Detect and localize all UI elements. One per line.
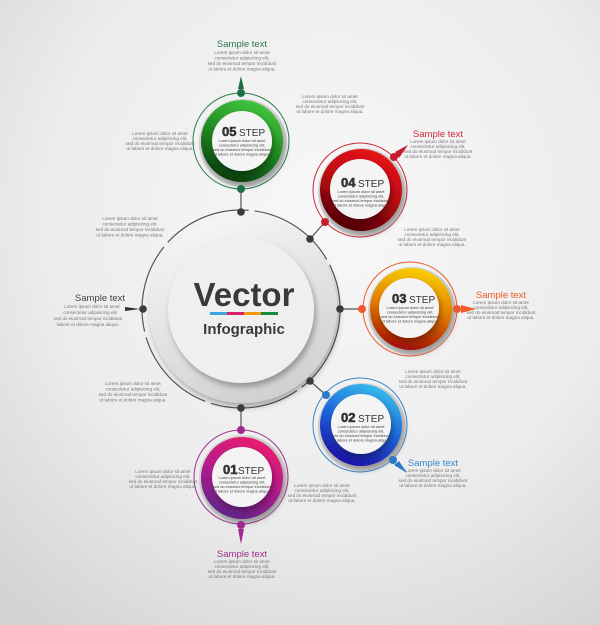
step 02: STEP xyxy=(358,414,384,425)
text block: sed do eiusmod tempor incididunt xyxy=(288,493,357,498)
text block: sed do eiusmod tempor incididunt xyxy=(296,104,365,109)
text block: Lorem ipsum dolor sit amet xyxy=(105,381,161,386)
heading 02 xyxy=(399,458,468,488)
text block: Lorem ipsum dolor sit amet xyxy=(404,227,460,232)
step 03: Lorem ipsum dolor sit amet xyxy=(387,305,434,310)
text block: consectetur adipisicing elit, xyxy=(295,488,349,493)
text block: sed do eiusmod tempor incididunt xyxy=(129,479,198,484)
step 02: consectetur adipisicing elit, xyxy=(338,428,384,434)
heading 04: Lorem ipsum dolor sit amet xyxy=(410,139,466,144)
heading 01: consectetur adipisicing elit, xyxy=(215,564,269,569)
heading 02: Sample text xyxy=(408,458,458,469)
heading 05: sed do eiusmod tempor incididunt xyxy=(208,61,277,66)
step 01: ut labore et dolore magna aliqua. xyxy=(214,488,270,494)
step 05: sed do eiusmod tempor incididunt xyxy=(213,147,272,152)
text block: consectetur adipisicing elit, xyxy=(106,386,160,392)
step 05: 05 xyxy=(222,124,236,139)
step 02: ut labore et dolore magna aliqua. xyxy=(333,438,389,442)
heading 05: consectetur adipisicing elit, xyxy=(215,56,269,60)
step 05: Lorem ipsum dolor sit amet xyxy=(219,138,266,143)
heading 04 xyxy=(404,129,473,159)
heading 04: ut labore et dolore magna aliqua. xyxy=(404,154,472,159)
text block: sed do eiusmod tempor incididunt xyxy=(398,237,467,242)
heading 02: ut labore et dolore magna aliqua. xyxy=(399,483,467,488)
step 05: ut labore et dolore magna aliqua. xyxy=(214,152,270,156)
text block xyxy=(296,94,365,114)
text block: consectetur adipisicing elit, xyxy=(405,232,459,237)
heading 03: consectetur adipisicing elit, xyxy=(474,305,528,310)
step 03: consectetur adipisicing elit, xyxy=(387,310,433,314)
step 04: STEP xyxy=(358,179,384,190)
text block: sed do eiusmod tempor incididunt xyxy=(99,392,168,397)
text block xyxy=(129,469,198,489)
text block: ut labore et dolore magna aliqua. xyxy=(99,398,167,402)
heading 02: sed do eiusmod tempor incididunt xyxy=(399,478,468,483)
heading 03: Lorem ipsum dolor sit amet xyxy=(473,300,529,305)
text block: ut labore et dolore magna aliqua. xyxy=(96,232,164,238)
heading 05 xyxy=(208,39,277,72)
heading left: Sample text xyxy=(75,293,125,304)
heading 05: Sample text xyxy=(217,39,267,50)
text block: ut labore et dolore magna aliqua. xyxy=(129,484,197,489)
step 01: sed do eiusmod tempor incididunt xyxy=(213,484,272,489)
step 05: consectetur adipisicing elit, xyxy=(219,142,265,148)
heading 01: ut labore et dolore magna aliqua. xyxy=(208,574,276,579)
text block: sed do eiusmod tempor incididunt xyxy=(96,227,165,232)
text block: consectetur adipisicing elit, xyxy=(303,99,357,104)
heading left: sed do eiusmod tempor incididunt xyxy=(54,316,123,321)
text block: Lorem ipsum dolor sit amet xyxy=(102,216,158,221)
heading 05: ut labore et dolore magna aliqua. xyxy=(208,66,276,72)
heading left: labore et dolore magna aliqua. xyxy=(57,322,119,327)
text block: consectetur adipisicing elit, xyxy=(136,474,190,479)
step 02: Lorem ipsum dolor sit amet xyxy=(338,424,385,429)
text block xyxy=(96,216,165,238)
heading 01: Sample text xyxy=(217,549,267,560)
text block: Lorem ipsum dolor sit amet xyxy=(302,94,358,99)
step 03: 03 xyxy=(392,291,406,306)
step 01: Lorem ipsum dolor sit amet xyxy=(219,475,266,480)
subtitle: Infographic xyxy=(203,321,285,338)
step 01: consectetur adipisicing elit, xyxy=(219,480,265,484)
text block: consectetur adipisicing elit, xyxy=(406,374,460,379)
heading 01 xyxy=(208,549,277,579)
step 03: ut labore et dolore magna aliqua. xyxy=(382,318,438,324)
step 02 xyxy=(313,378,407,473)
text block xyxy=(399,369,468,389)
heading 03: Sample text xyxy=(476,290,526,301)
heading 01: Lorem ipsum dolor sit amet xyxy=(214,559,270,564)
text blocks xyxy=(126,131,195,151)
step 04: consectetur adipisicing elit, xyxy=(338,194,384,198)
heading 05: Lorem ipsum dolor sit amet xyxy=(214,50,270,55)
text block: consectetur adipisicing elit, xyxy=(103,222,157,226)
title: Vector xyxy=(194,276,295,313)
step 04: Lorem ipsum dolor sit amet xyxy=(338,189,385,194)
step 04: sed do eiusmod tempor incididunt xyxy=(332,198,391,203)
step 03 xyxy=(358,262,476,356)
text block xyxy=(288,483,357,503)
heading 04: sed do eiusmod tempor incididunt xyxy=(404,149,473,154)
text block xyxy=(99,381,168,402)
heading 03: ut labore et dolore magna aliqua. xyxy=(467,315,535,320)
text block: Lorem ipsum dolor sit amet xyxy=(405,369,461,374)
text block: ut labore et dolore magna aliqua. xyxy=(296,109,364,114)
text block: Lorem ipsum dolor sit amet xyxy=(135,469,191,474)
text blocks: Lorem ipsum dolor sit amet xyxy=(132,131,188,136)
heading 04: Sample text xyxy=(413,129,463,140)
step 05 xyxy=(193,76,289,193)
step 03: STEP xyxy=(409,295,435,306)
central hub xyxy=(139,208,344,412)
step 01: 01 xyxy=(223,462,237,477)
step 02: sed do eiusmod tempor incididunt xyxy=(332,433,391,438)
heading 01: sed do eiusmod tempor incididunt xyxy=(208,569,277,574)
step 04: ut labore et dolore magna aliqua. xyxy=(333,202,389,208)
text blocks: consectetur adipisicing elit, xyxy=(133,136,187,141)
heading 03: sed do eiusmod tempor incididunt xyxy=(467,310,536,315)
heading 04: consectetur adipisicing elit, xyxy=(411,144,465,149)
step 01: STEP xyxy=(238,466,264,477)
text block: sed do eiusmod tempor incididunt xyxy=(399,379,468,384)
heading left: Lorem ipsum dolor sit amet xyxy=(64,304,120,309)
text block xyxy=(398,227,467,247)
step 05: STEP xyxy=(239,128,265,139)
heading left: consectetur adipisicing elit xyxy=(63,310,118,315)
heading 03 xyxy=(467,290,536,320)
text block: ut labore et dolore magna aliqua. xyxy=(288,498,356,503)
step 02: 02 xyxy=(341,410,355,425)
text block: Lorem ipsum dolor sit amet xyxy=(294,483,350,488)
text block: ut labore et dolore magna aliqua. xyxy=(398,242,466,247)
text blocks: sed do eiusmod tempor incididunt xyxy=(126,141,195,146)
text block: ut labore et dolore magna aliqua. xyxy=(399,384,467,389)
color bar xyxy=(210,312,278,315)
connector lines xyxy=(241,189,362,430)
step 01 xyxy=(194,426,288,544)
step 03: sed do eiusmod tempor incididunt xyxy=(381,314,440,319)
heading 02: consectetur adipisicing elit, xyxy=(406,473,460,478)
heading left xyxy=(54,293,140,327)
text blocks: ut labore et dolore magna aliqua. xyxy=(126,146,194,151)
step 04: 04 xyxy=(341,175,356,190)
heading 02: Lorem ipsum dolor sit amet xyxy=(405,468,461,473)
step 04 xyxy=(313,143,408,237)
